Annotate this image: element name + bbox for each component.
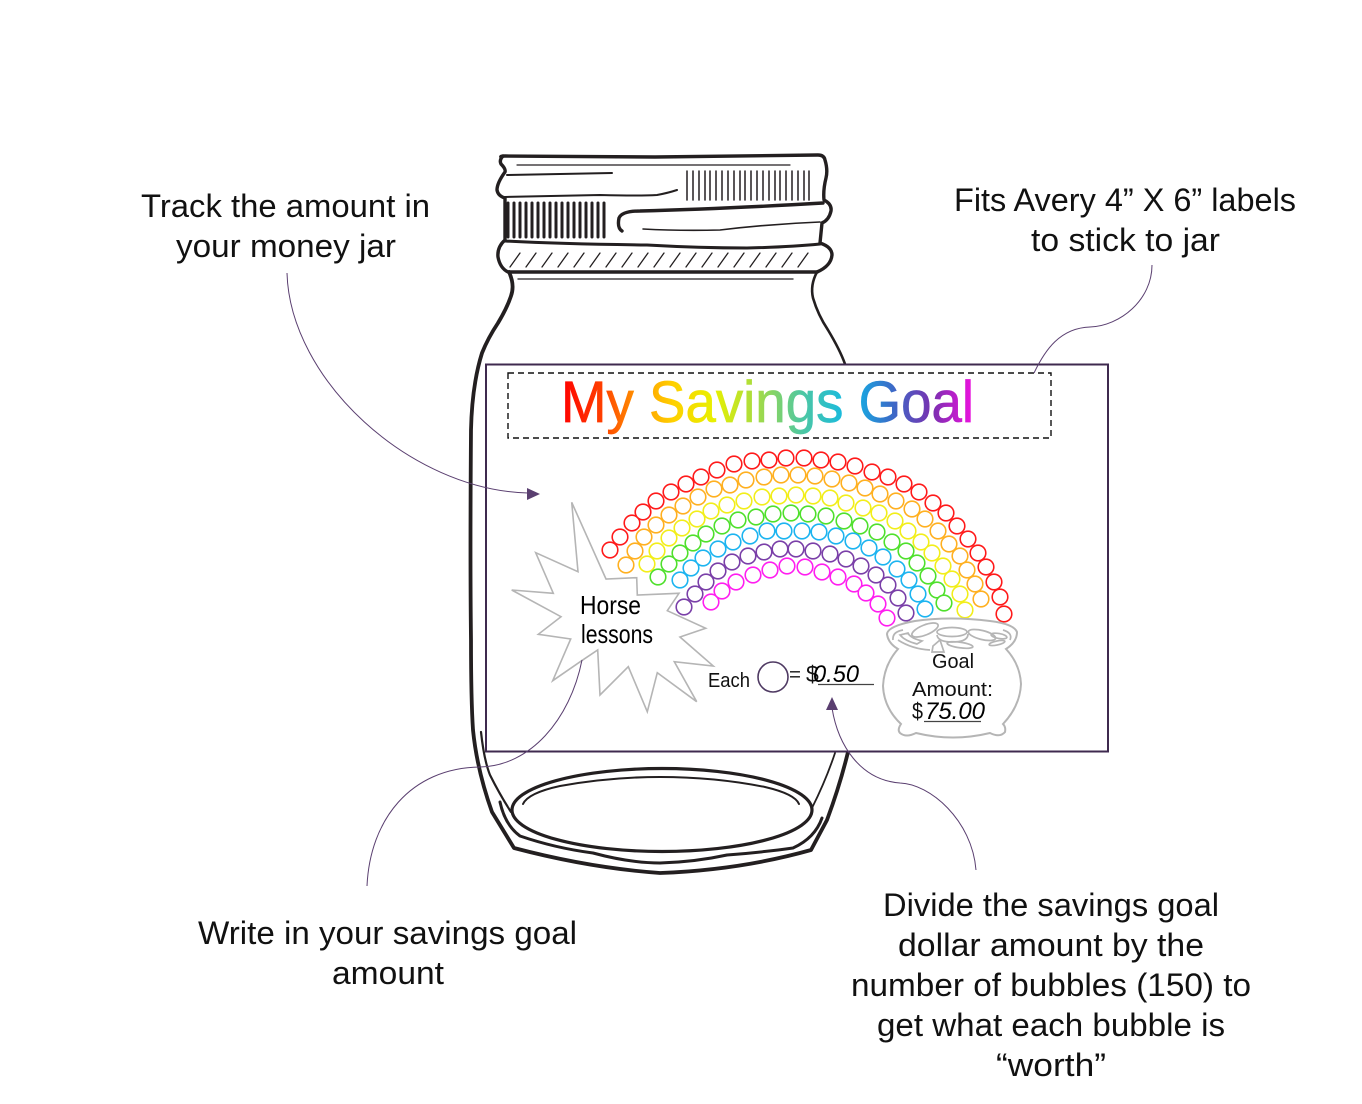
title: My Savings Goal: My Savings Goal	[561, 370, 974, 435]
icon: sample bubble	[758, 662, 788, 692]
callout: divide the savings goal: number of bubbles (150) to	[851, 967, 1251, 1003]
pot body	[883, 618, 1021, 738]
callout: fits Avery labels: Fits Avery 4” X 6” labels	[954, 182, 1296, 218]
callout: track the amount	[141, 188, 540, 500]
title dashed box	[508, 373, 1051, 438]
bubble value key: Each	[708, 670, 750, 692]
jar lid	[497, 155, 832, 279]
bubble value key: =	[789, 665, 801, 686]
handwritten goal name: Horse	[580, 590, 641, 620]
callout: fits Avery labels	[954, 182, 1296, 373]
yellow band	[639, 487, 973, 618]
mason jar illustration	[470, 155, 848, 873]
lid ridge ticks, right	[687, 171, 809, 200]
starburst goal label: lessons	[581, 619, 653, 649]
lid ridge ticks, left	[508, 203, 604, 237]
pot of gold with goal amount	[883, 618, 1021, 738]
callout: write in goal	[198, 660, 582, 991]
blue band	[672, 523, 933, 617]
arrow to bubble value	[826, 697, 976, 870]
magenta band	[703, 558, 895, 626]
jar body outline	[470, 272, 848, 873]
callout: write in goal: amount	[332, 955, 444, 991]
callout: track the amount: Track the amount in	[141, 188, 430, 224]
red band	[602, 450, 1012, 622]
purple band	[676, 541, 914, 621]
callout: write in goal: Write in your savings goal	[198, 915, 577, 951]
pot of gold with goal amount: 75.00	[925, 698, 986, 725]
starburst goal label	[512, 502, 713, 712]
label panel	[486, 364, 1108, 752]
callout: divide the savings goal: dollar amount by the	[898, 927, 1204, 963]
rainbow of savings bubbles	[602, 450, 1012, 626]
bubble value key: $	[806, 661, 819, 687]
bubble value key: 0.50	[813, 661, 860, 688]
pot of gold with goal amount: $	[912, 698, 923, 724]
goal amount text: Goal	[932, 651, 974, 673]
orange band	[618, 467, 989, 607]
callout: divide the savings goal: get what each bubble is	[877, 1007, 1225, 1043]
green band	[650, 505, 952, 611]
callout: divide the savings goal	[826, 697, 1251, 1083]
callout: track the amount: your money jar	[176, 228, 396, 264]
arrow to rainbow	[287, 273, 540, 500]
lid band hatching	[510, 253, 808, 267]
bubble value key	[708, 661, 874, 692]
callout: fits Avery labels: to stick to jar	[1031, 222, 1220, 258]
callout: divide the savings goal: Divide the savings goal	[883, 887, 1219, 923]
jar base ellipse	[512, 768, 812, 852]
pot of gold with goal amount: Amount:	[912, 679, 993, 701]
pot rim coins	[893, 620, 1011, 652]
callout: divide the savings goal: “worth”	[996, 1047, 1106, 1083]
connector to starburst	[367, 660, 582, 886]
connector to label	[1034, 265, 1152, 373]
